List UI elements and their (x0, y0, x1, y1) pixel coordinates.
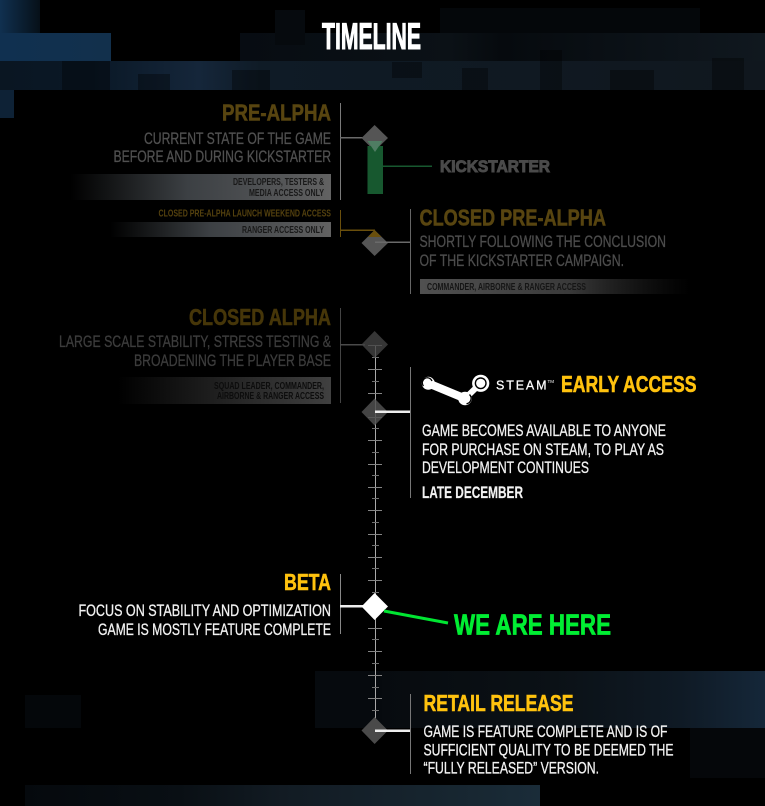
closed alpha description (59, 333, 331, 370)
steam wordmark: STEAM (496, 378, 546, 392)
early access milestone diamond (362, 398, 388, 426)
ranger access box (110, 222, 331, 237)
closed pre-alpha description (420, 233, 666, 270)
closed alpha heading: CLOSED ALPHA (189, 304, 331, 330)
pre-alpha access box: MEDIA ACCESS ONLY (249, 187, 324, 199)
panel: closed pre-alpha (375, 204, 690, 294)
early access date: LATE DECEMBER (422, 484, 523, 502)
early access description: GAME BECOMES AVAILABLE TO ANYONE (422, 422, 666, 440)
beta heading: BETA (284, 569, 331, 595)
closed pre-alpha description: SHORTLY FOLLOWING THE CONCLUSION (420, 233, 666, 251)
panel: retail release (375, 690, 674, 778)
early access heading: EARLY ACCESS (561, 371, 696, 397)
pre-alpha description: BEFORE AND DURING KICKSTARTER (114, 148, 331, 166)
retail release heading: RETAIL RELEASE (424, 690, 574, 716)
kickstarter period bar (368, 141, 550, 194)
panel: closed pre-alpha launch weekend (110, 208, 375, 237)
beta description (78, 602, 331, 639)
early access description: FOR PURCHASE ON STEAM, TO PLAY AS (422, 441, 664, 459)
pre-alpha access box (70, 174, 331, 200)
panel: early access (375, 367, 696, 502)
retail release description: SUFFICIENT QUALITY TO BE DEEMED THE (424, 742, 674, 760)
kickstarter label: KICKSTARTER (440, 158, 550, 176)
beta description: FOCUS ON STABILITY AND OPTIMIZATION (78, 602, 331, 620)
arrow: pointer line (384, 611, 448, 623)
beta description: GAME IS MOSTLY FEATURE COMPLETE (98, 621, 331, 639)
closed pre-alpha milestone diamond (362, 230, 388, 256)
panel: pre-alpha (70, 100, 365, 200)
early access description: DEVELOPMENT CONTINUES (422, 459, 589, 477)
closed pre-alpha heading: CLOSED PRE-ALPHA (420, 204, 606, 230)
commander access box: COMMANDER, AIRBORNE & RANGER ACCESS (427, 281, 586, 293)
we are here callout (362, 593, 611, 642)
squad leader access box: SQUAD LEADER, COMMANDER, (214, 380, 324, 392)
pre-alpha milestone diamond (362, 125, 388, 151)
current milestone diamond (362, 593, 388, 620)
retail release milestone diamond (362, 717, 388, 744)
retail release description: “FULLY RELEASED” VERSION. (424, 760, 599, 778)
pre-alpha heading: PRE-ALPHA (222, 100, 331, 126)
squad leader access box: AIRBORNE & RANGER ACCESS (217, 390, 324, 402)
timeline axis with ticks (368, 345, 382, 733)
panel: beta (78, 569, 365, 639)
icon: steam logo (422, 375, 489, 405)
pre-alpha description: CURRENT STATE OF THE GAME (144, 130, 331, 148)
closed pre-alpha description: OF THE KICKSTARTER CAMPAIGN. (420, 252, 624, 270)
panel: closed alpha (59, 304, 365, 404)
launch weekend note: CLOSED PRE-ALPHA LAUNCH WEEKEND ACCESS (158, 208, 331, 220)
early access description (422, 422, 666, 477)
closed alpha description: BROADENING THE PLAYER BASE (134, 352, 331, 370)
closed alpha milestone diamond (362, 331, 388, 358)
steam trademark: TM (548, 379, 554, 384)
squad leader access box (118, 377, 331, 404)
title: TIMELINE (322, 16, 421, 57)
closed alpha description: LARGE SCALE STABILITY, STRESS TESTING & (59, 333, 331, 351)
pre-alpha access box: DEVELOPERS, TESTERS & (233, 176, 324, 188)
retail release description (424, 723, 674, 778)
we are here label: WE ARE HERE (454, 610, 611, 642)
pre-alpha description (114, 130, 331, 166)
retail release description: GAME IS FEATURE COMPLETE AND IS OF (424, 723, 668, 741)
ranger access box: RANGER ACCESS ONLY (242, 224, 324, 236)
